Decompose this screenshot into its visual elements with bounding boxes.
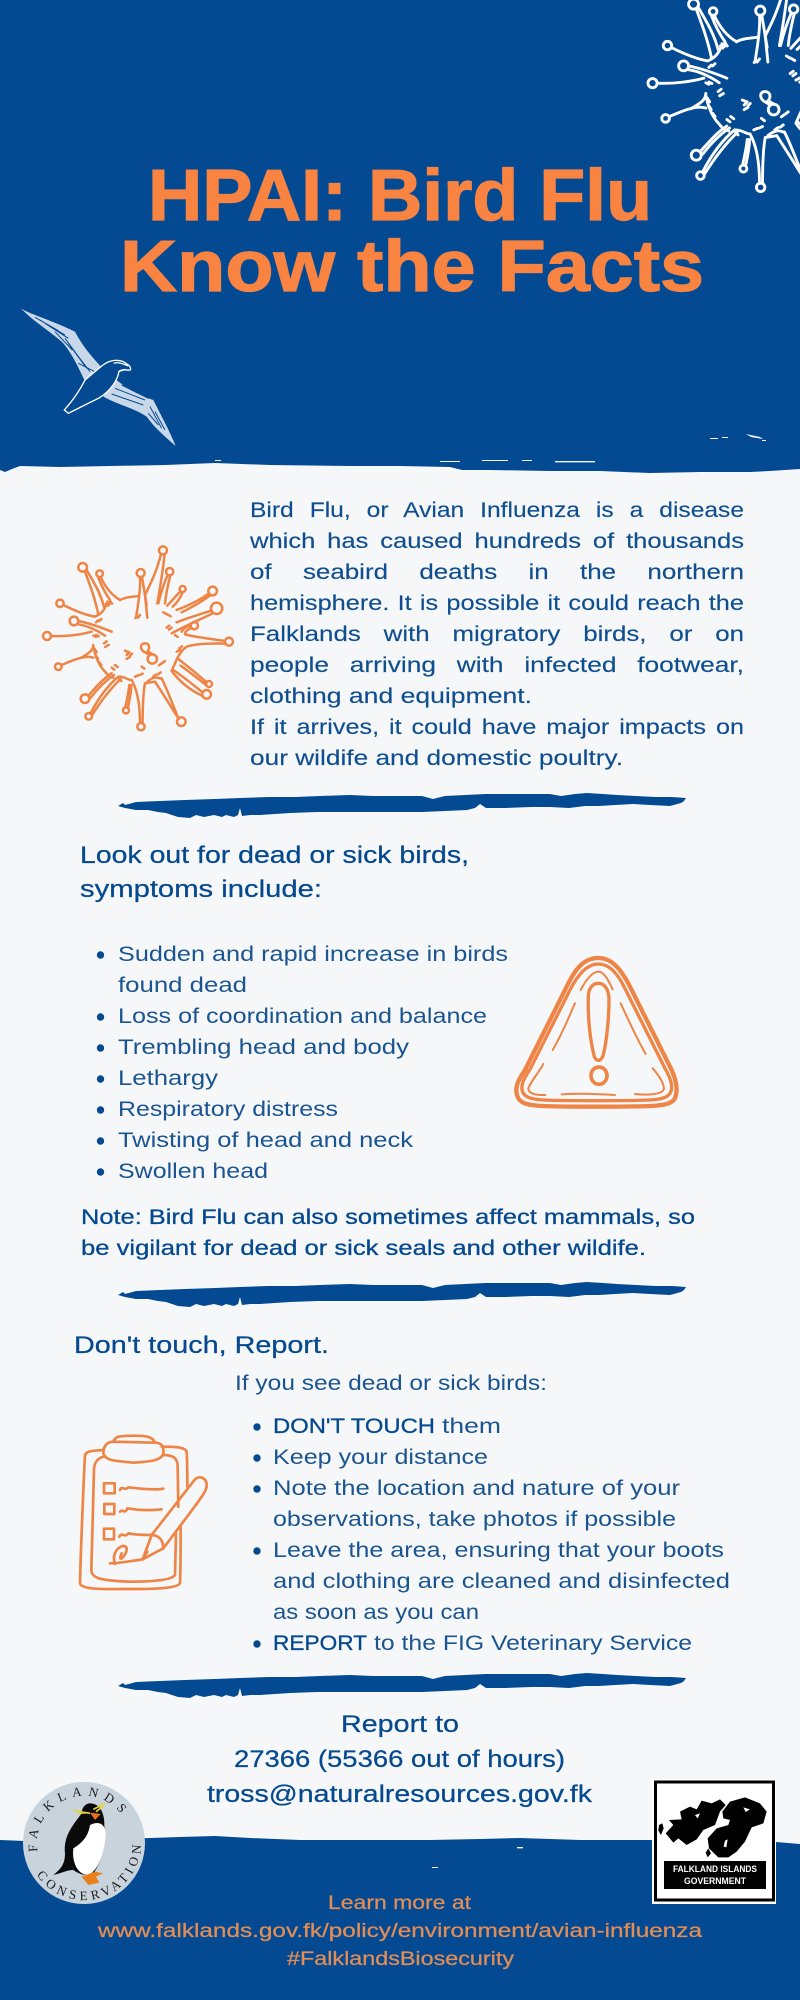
intro text: our wildife and domestic poultry. <box>250 746 623 770</box>
symptoms list: Swollen head <box>118 1159 268 1183</box>
report contact block: Report to <box>341 1711 459 1738</box>
intro text: clothing and equipment. <box>250 684 532 708</box>
logo lettering: FALKLANDS <box>28 1787 126 1852</box>
logo: Falkland Islands Government: GOVERNMENT <box>684 1876 746 1887</box>
panel: symptoms <box>80 842 695 1260</box>
logo lettering <box>28 1787 141 1900</box>
logo: Falklands Conservation <box>23 1782 145 1904</box>
symptoms heading <box>80 842 469 903</box>
title: Know the Facts <box>120 227 704 307</box>
logo lettering: CONSERVATION <box>38 1844 141 1900</box>
footer text: www.falklands.gov.fk/policy/environment/avian-influenza <box>97 1921 703 1942</box>
report contact block <box>207 1711 593 1808</box>
symptoms list: Lethargy <box>118 1066 218 1090</box>
map of the islands <box>658 1797 767 1857</box>
note: Note: Bird Flu can also sometimes affect mammals, so <box>81 1205 695 1229</box>
symptoms list: Sudden and rapid increase in birds <box>118 942 508 966</box>
intro text: people arriving with infected footwear, <box>250 653 744 677</box>
divider brush stroke 3 <box>118 1673 686 1698</box>
logo: Falkland Islands Government: FALKLAND ISLANDS <box>673 1864 757 1875</box>
action list: REPORT <box>273 1631 367 1655</box>
intro text <box>249 498 744 770</box>
symptoms list <box>97 942 508 1183</box>
report contact block: 27366 (55366 out of hours) <box>234 1746 565 1773</box>
action list: and clothing are cleaned and disinfected <box>273 1569 730 1593</box>
symptoms heading: symptoms include: <box>80 876 322 903</box>
action list: observations, take photos if possible <box>273 1507 676 1531</box>
symptoms list: Trembling head and body <box>118 1035 409 1059</box>
divider brush stroke 2 <box>118 1282 686 1307</box>
intro text: Bird Flu, or Avian Influenza is a disease <box>250 498 744 522</box>
intro text: hemisphere. It is possible it could reach the <box>250 591 744 615</box>
section intro: If you see dead or sick birds: <box>235 1371 547 1395</box>
action list: to the FIG Veterinary Service <box>374 1631 692 1655</box>
intro text: Falklands with migratory birds, or on <box>250 622 744 646</box>
action list: Leave the area, ensuring that your boots <box>273 1538 724 1562</box>
action list: them <box>442 1414 501 1438</box>
intro text: of seabird deaths in the northern <box>250 560 744 584</box>
note <box>81 1205 695 1260</box>
title <box>120 156 704 307</box>
action list: as soon as you can <box>273 1600 479 1624</box>
intro text: If it arrives, it could have major impacts on <box>250 715 744 739</box>
footer specks <box>432 1847 523 1868</box>
action list: Note the location and nature of your <box>273 1476 680 1500</box>
icon: warning triangle <box>516 958 677 1107</box>
section heading: Don't touch, Report. <box>74 1332 329 1359</box>
footer band <box>0 1836 800 2000</box>
divider brush stroke 1 <box>118 793 686 818</box>
icon: clipboard <box>80 1436 207 1589</box>
symptoms list: Twisting of head and neck <box>118 1128 413 1152</box>
logo: Falkland Islands Government <box>652 1779 776 1904</box>
symptoms list: Respiratory distress <box>118 1097 338 1121</box>
header edge specks <box>215 434 766 462</box>
footer text <box>97 1893 703 1970</box>
intro text: which has caused hundreds of thousands <box>249 529 744 553</box>
footer text: #FalklandsBiosecurity <box>287 1949 515 1970</box>
action list <box>253 1414 730 1655</box>
header band <box>0 0 800 473</box>
action list: DON'T TOUCH <box>273 1414 435 1438</box>
panel: introduction <box>43 498 744 770</box>
panel: don't touch, report <box>74 1332 730 1655</box>
symptoms list: found dead <box>118 973 247 997</box>
title: HPAI: Bird Flu <box>148 156 652 236</box>
icon: albatross <box>21 308 176 446</box>
symptoms list: Loss of coordination and balance <box>118 1004 487 1028</box>
penguin <box>53 1803 106 1885</box>
action list: Keep your distance <box>273 1445 488 1469</box>
symptoms heading: Look out for dead or sick birds, <box>80 842 469 869</box>
report contact block: tross@naturalresources.gov.fk <box>207 1781 593 1808</box>
icon: virus <box>43 546 233 730</box>
virus icon: white, top right <box>648 0 800 192</box>
note: be vigilant for dead or sick seals and other wildife. <box>81 1236 646 1260</box>
footer text: Learn more at <box>328 1893 472 1914</box>
